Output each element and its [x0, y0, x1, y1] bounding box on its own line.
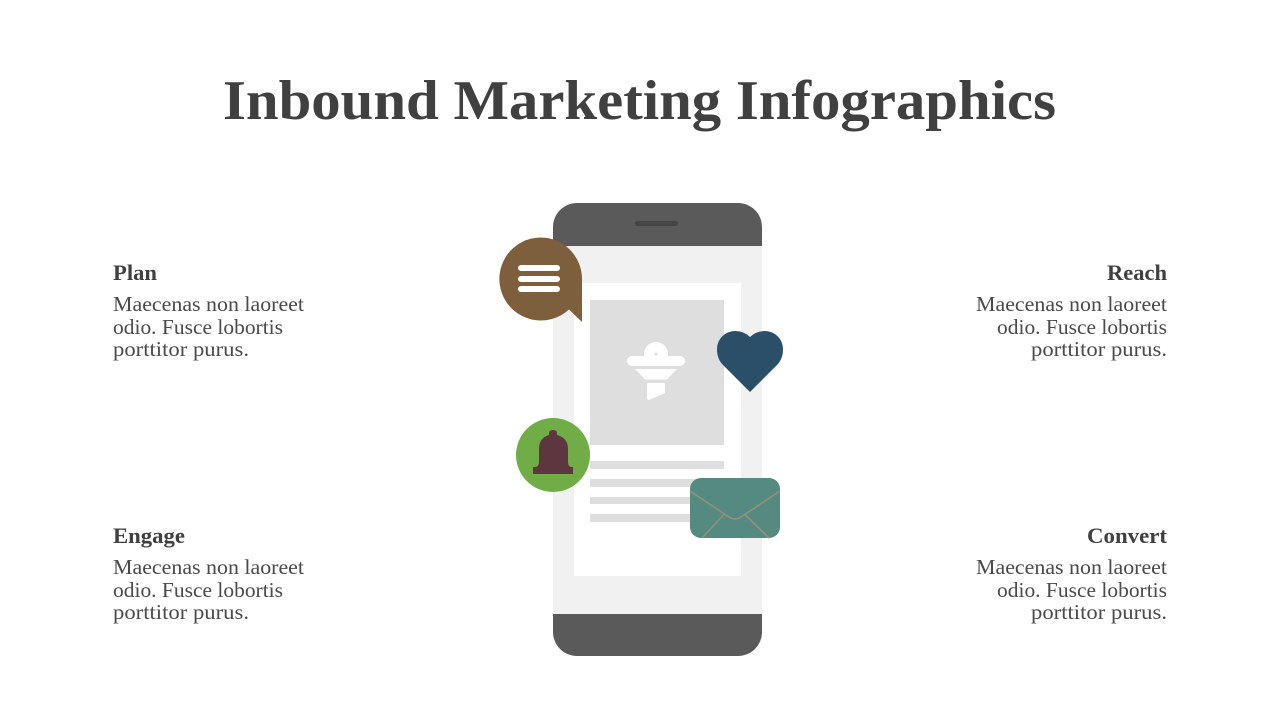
text block: Plan: Maecenas non laoreet: [113, 292, 304, 316]
icon: envelope: [690, 478, 780, 538]
text block: Convert: Convert: [1087, 523, 1168, 548]
text block: Reach: Reach: [1107, 260, 1167, 285]
text block: Engage: porttitor purus.: [113, 600, 249, 624]
text block: Engage: odio. Fusce lobortis: [113, 578, 283, 602]
text line placeholders: [590, 461, 724, 522]
text block: Reach: porttitor purus.: [1031, 337, 1167, 361]
text block: Convert: Maecenas non laoreet: [976, 555, 1167, 579]
phone bottom bezel: [553, 614, 762, 656]
text block: Convert: [976, 523, 1168, 624]
phone body: [553, 246, 762, 614]
text block: Reach: odio. Fusce lobortis: [997, 315, 1167, 339]
text block: Plan: odio. Fusce lobortis: [113, 315, 283, 339]
text block: Convert: odio. Fusce lobortis: [997, 578, 1167, 602]
icon: funnel: [627, 342, 685, 400]
title: Inbound Marketing Infographics: [223, 70, 1056, 132]
icon: bell: [516, 418, 590, 492]
text block: Plan: Plan: [113, 260, 157, 285]
image placeholder: [590, 300, 724, 445]
icon: heart: [717, 331, 783, 392]
phone screen: [574, 283, 741, 576]
phone illustration: [553, 203, 762, 656]
icon: speech bubble: [499, 238, 582, 322]
phone speaker: [635, 221, 678, 226]
text block: Engage: Engage: [113, 523, 185, 548]
text block: Engage: Maecenas non laoreet: [113, 555, 304, 579]
text block: Engage: [113, 523, 304, 624]
text block: Reach: [976, 260, 1167, 361]
text block: Plan: [113, 260, 304, 361]
text block: Convert: porttitor purus.: [1031, 600, 1167, 624]
text block: Reach: Maecenas non laoreet: [976, 292, 1167, 316]
phone top bezel: [553, 203, 762, 246]
text block: Plan: porttitor purus.: [113, 337, 249, 361]
